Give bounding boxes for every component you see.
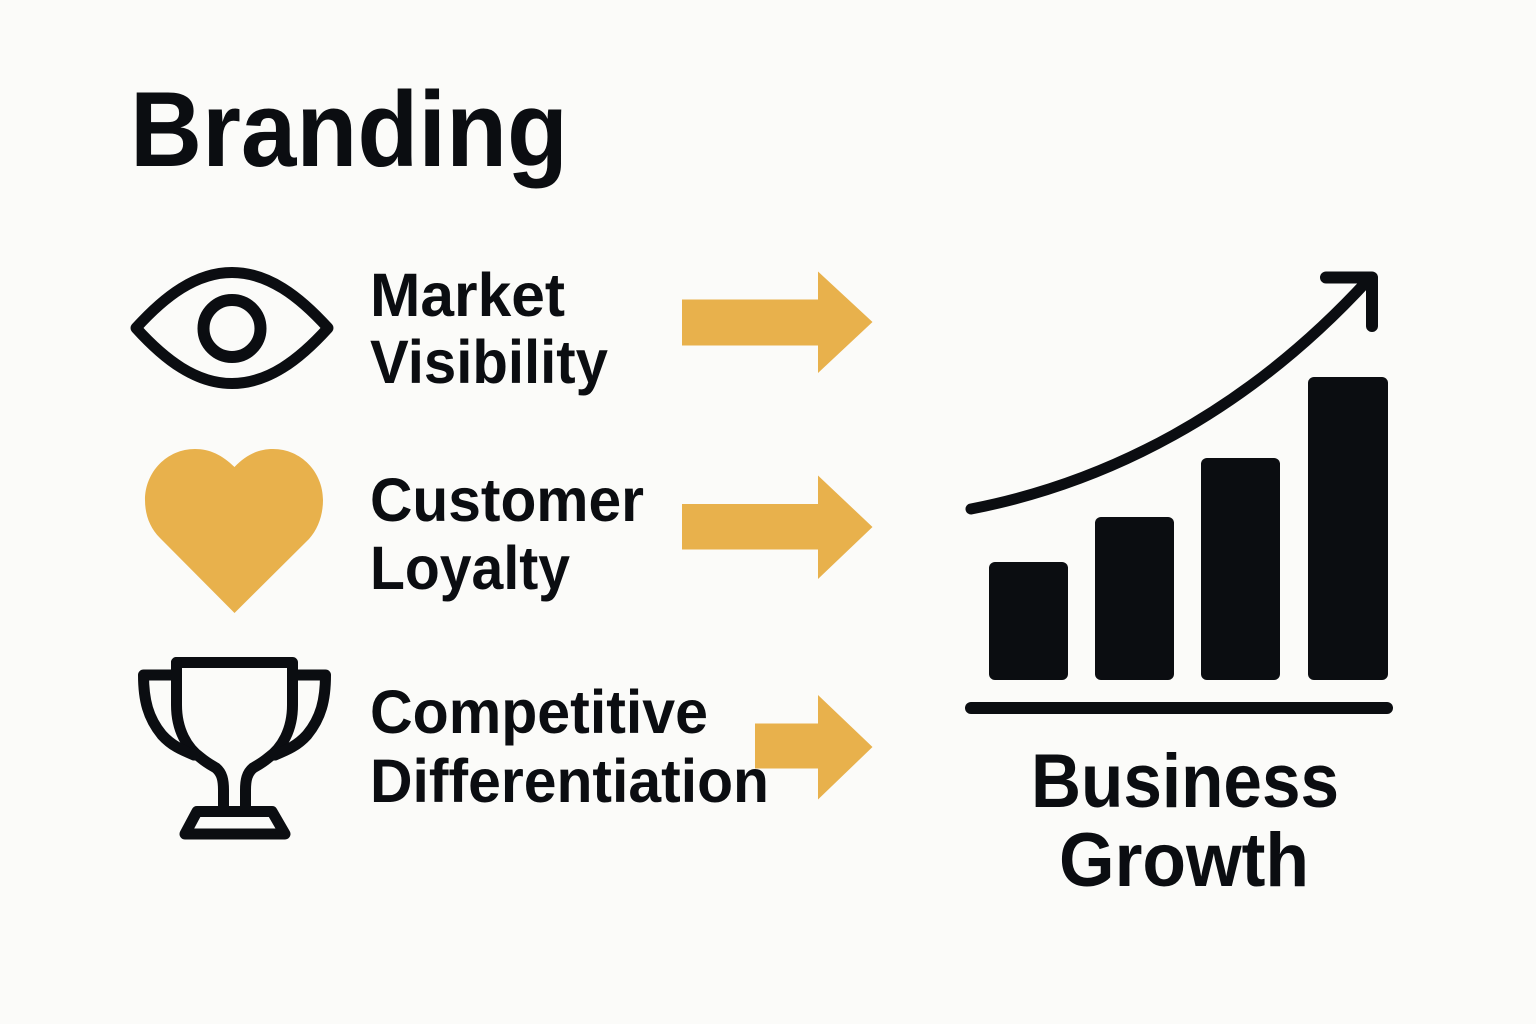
text: competitive differentiation [370,678,769,815]
chart: business growth [965,278,1393,714]
text: competitive differentiation: Competitive [370,678,708,746]
text: customer loyalty: Loyalty [370,534,570,602]
text: customer loyalty [370,466,644,602]
text: market visibility [370,261,608,396]
arrow: customer loyalty [682,476,872,579]
title: Branding [130,69,568,189]
icon: heart [145,449,323,613]
baseline [965,702,1393,714]
text: competitive differentiation: Differentiation [370,747,769,815]
arrow: competitive differentiation [755,695,872,800]
arrow: market visibility [682,272,872,373]
text: business growth: Growth [1059,818,1309,903]
text: market visibility: Market [370,261,565,329]
icon: eye [136,272,328,384]
bars [989,377,1388,680]
text: customer loyalty: Customer [370,466,644,534]
growth arrow [971,278,1372,509]
icon: trophy [144,662,326,834]
text: business growth: Business [1031,739,1339,824]
text: market visibility: Visibility [370,328,608,396]
text: business growth [1031,739,1339,903]
